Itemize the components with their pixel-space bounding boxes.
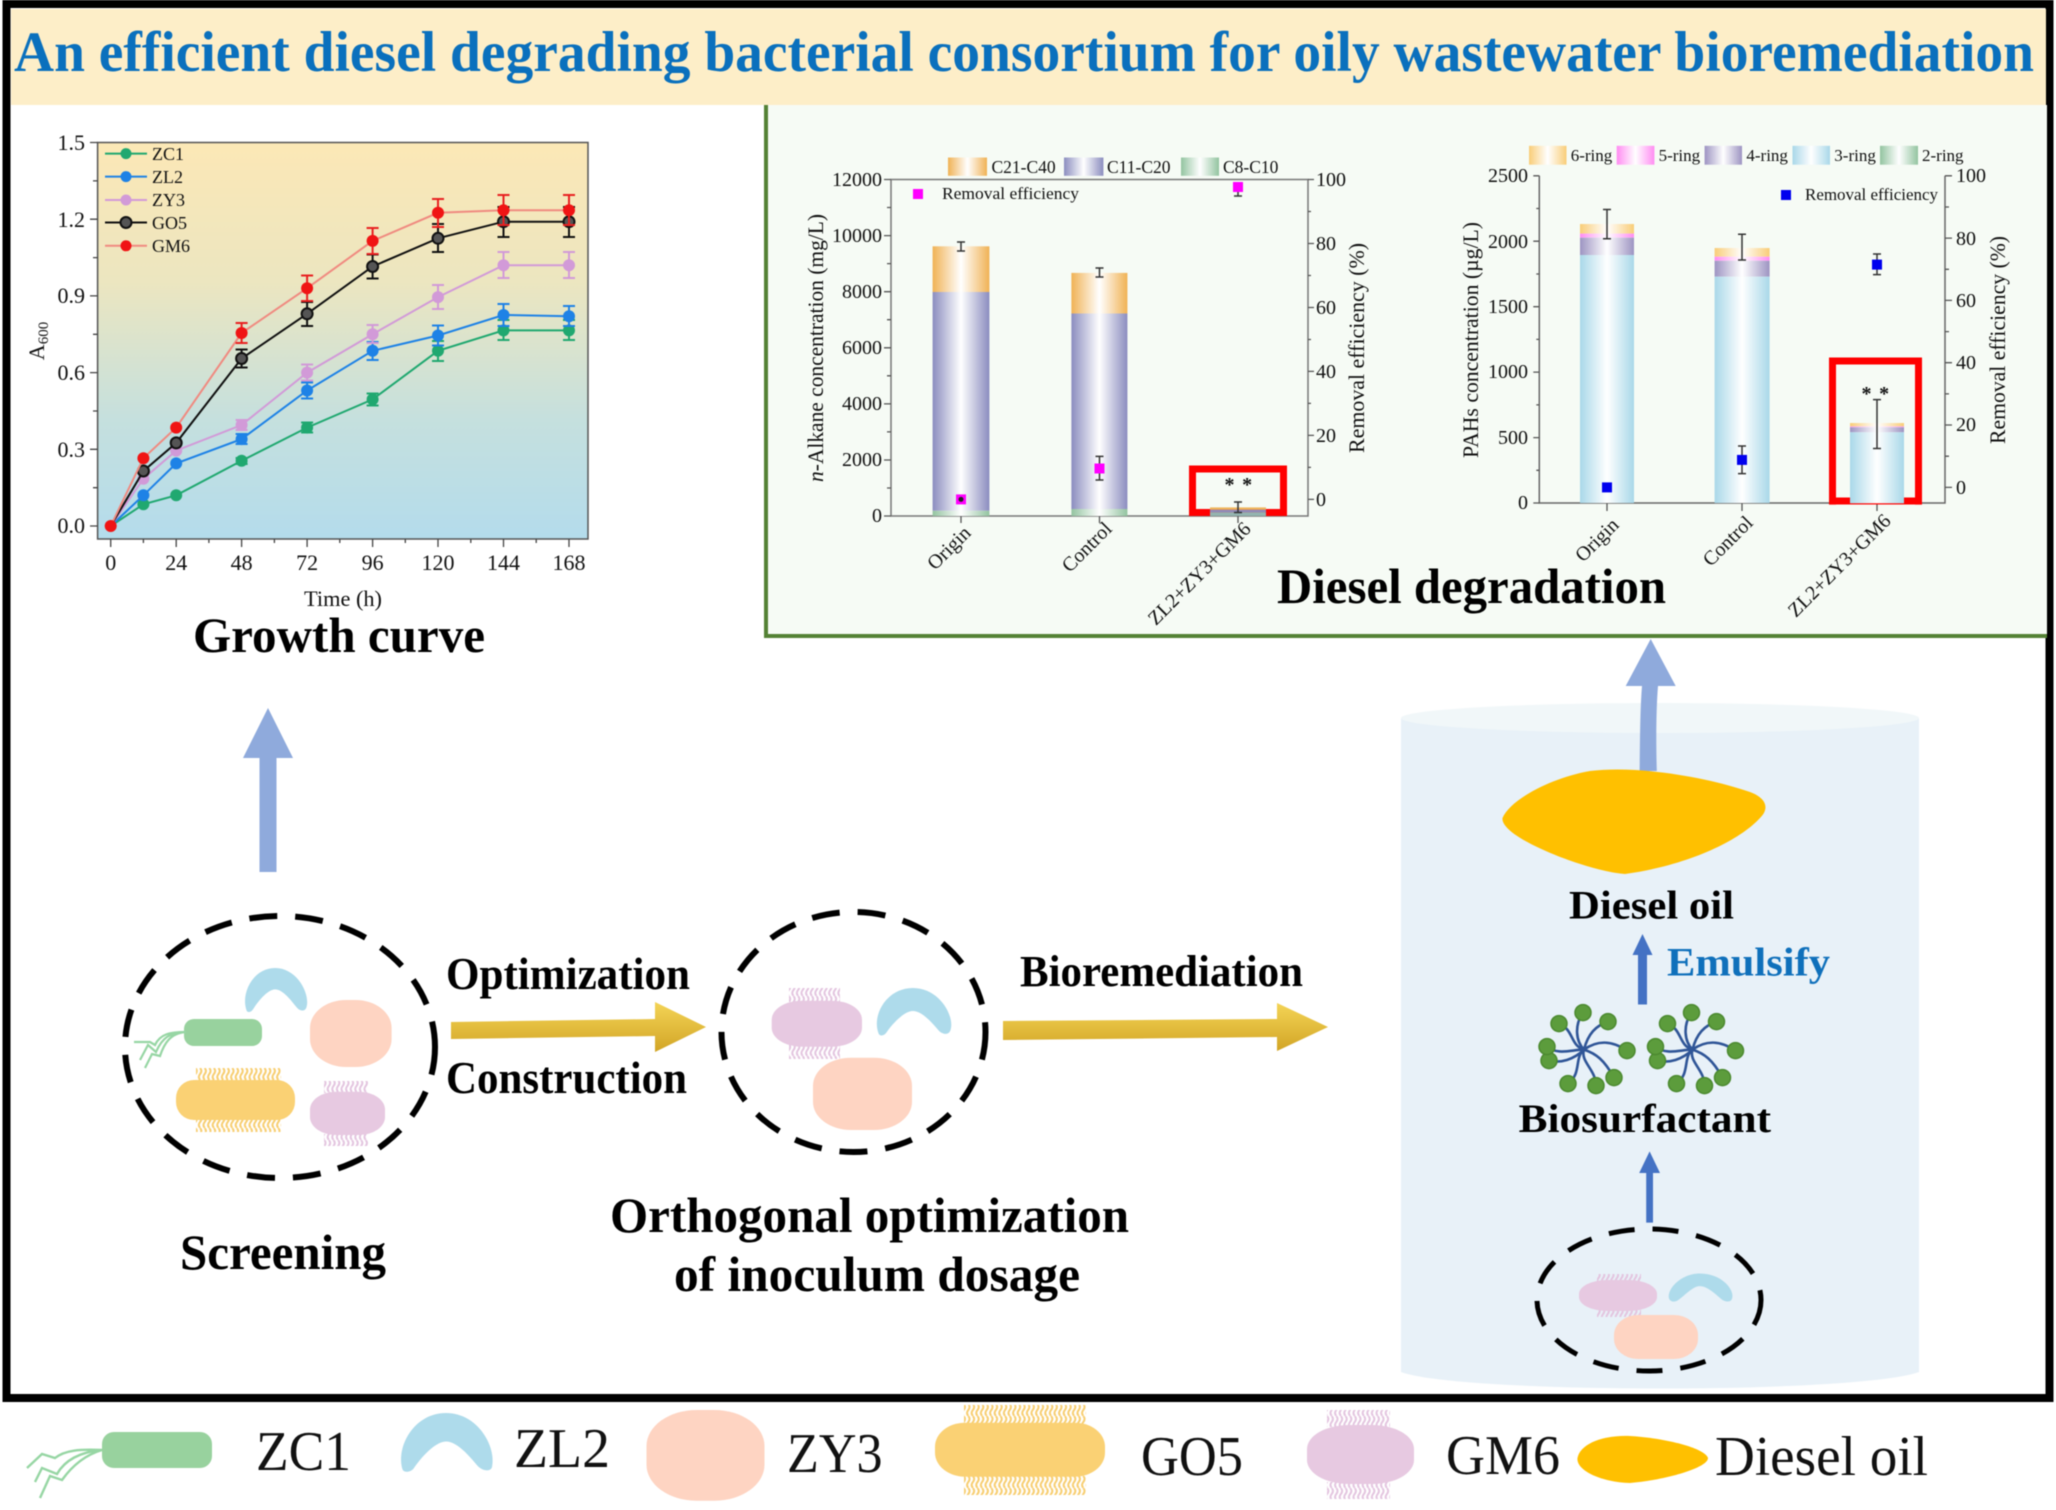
chart: PAHs: 1500: [1488, 296, 1528, 318]
chart: n-alkane: 6000: [842, 337, 882, 359]
chart: PAHs: 0: [1956, 477, 1966, 499]
legend diesel oil: [1577, 1426, 1928, 1488]
legend GO5: [935, 1405, 1243, 1495]
panel: growth curve chart: Time (h): [304, 586, 382, 611]
chart: n-alkane: Removal efficiency (%): [1344, 243, 1369, 453]
chart: n-alkane: 80: [1316, 233, 1336, 255]
legend GM6: [1307, 1410, 1560, 1499]
cell GM6: [772, 988, 862, 1059]
arrow: screening to construction: [451, 1002, 706, 1052]
chart: PAHs: [1458, 146, 2010, 622]
title: An efficient diesel degrading bacterial consortium for oily wastewater bioremediation: [14, 21, 2034, 84]
legend: PAHs: [1529, 146, 1964, 165]
title band: [11, 9, 2046, 105]
panel: growth curve chart: 1.5: [58, 130, 85, 155]
panel: growth curve chart: 48: [231, 550, 253, 575]
cell ZC1: [134, 1019, 262, 1068]
label: diesel oil: Diesel oil: [1569, 883, 1734, 928]
panel: growth curve chart: 144: [487, 550, 520, 575]
chart: n-alkane: 100: [1316, 169, 1346, 191]
chart: PAHs: Control: [1699, 512, 1758, 571]
legend ZC1: ZC1: [256, 1421, 351, 1483]
cell GM6: [310, 1081, 385, 1146]
cell ZL2: [877, 988, 951, 1035]
panel: growth curve chart: 0: [105, 550, 116, 575]
chart: n-alkane: 0: [1316, 489, 1326, 511]
chart: PAHs: 60: [1956, 290, 1976, 312]
label: bioremediation: Bioremediation: [1020, 947, 1303, 996]
cell GO5: [176, 1068, 295, 1132]
biosurfactant micelles: [1539, 1005, 1744, 1094]
panel: diesel degradation: [766, 105, 2047, 636]
series ZY3: [111, 252, 575, 526]
cell ZL2: [245, 968, 307, 1012]
highlight box: [1192, 469, 1284, 516]
chart: PAHs: 80: [1956, 228, 1976, 250]
legend GM6: GM6: [1446, 1425, 1560, 1487]
chart: PAHs: 100: [1956, 165, 1986, 187]
growth chart legend: ZC1: [152, 144, 184, 164]
panel: growth curve chart: 0.0: [58, 513, 85, 538]
series GM6: [105, 195, 575, 532]
cell ZY3: [813, 1058, 912, 1130]
panel: bioreactor cylinder: [1401, 639, 1919, 1388]
label: of inoculum dosage: of inoculum dosage: [674, 1246, 1080, 1302]
legend ZY3: ZY3: [787, 1423, 882, 1485]
legend: alkane: C8-C10: [1223, 157, 1279, 177]
cell cluster: consortium: [1537, 1229, 1761, 1371]
legend: alkane: [948, 157, 1279, 177]
chart: PAHs: 2000: [1488, 231, 1528, 253]
chart: PAHs: 20: [1956, 414, 1976, 436]
panel: growth curve chart: 0.3: [58, 437, 85, 462]
label: optimization: Optimization: [446, 948, 690, 999]
chart: PAHs: 1000: [1488, 361, 1528, 383]
chart: n-alkane: 60: [1316, 297, 1336, 319]
chart: n-alkane: 20: [1316, 425, 1336, 447]
chart: n-alkane: n-Alkane concentration (mg/L): [803, 214, 828, 482]
chart: n-alkane: ZL2+ZY3+GM6: [1144, 518, 1256, 630]
bars: [933, 246, 989, 292]
legend ZC1: [27, 1421, 351, 1498]
chart: PAHs: PAHs concentration (µg/L): [1458, 222, 1483, 458]
panel: growth curve chart: 24: [165, 550, 187, 575]
growth chart legend: GO5: [152, 213, 187, 233]
legend: alkane: C21-C40: [992, 157, 1056, 177]
cell ZY3: [310, 1000, 392, 1067]
cell cluster: orthogonal optimization: [722, 912, 986, 1152]
legend ZY3: [646, 1410, 882, 1501]
chart: n-alkane: * *: [1225, 474, 1253, 496]
arrow: emulsify: [1632, 934, 1652, 1004]
chart: n-alkane: [803, 157, 1369, 630]
chart: n-alkane: 8000: [842, 281, 882, 303]
legend: PAHs: 3-ring: [1834, 146, 1876, 165]
chart: PAHs: 2500: [1488, 165, 1528, 187]
chart: n-alkane: 4000: [842, 393, 882, 415]
series ZC1: [111, 320, 575, 526]
highlight box: [1832, 361, 1918, 505]
panel: growth curve chart: A: [24, 344, 49, 360]
chart: PAHs: Origin: [1571, 514, 1624, 566]
growth chart legend: GM6: [152, 236, 190, 256]
chart: PAHs: 0: [1518, 492, 1528, 514]
panel: growth curve chart: 600: [36, 322, 52, 344]
arrow: to bioreactor: [1003, 1003, 1328, 1051]
legend diesel oil: Diesel oil: [1715, 1426, 1928, 1488]
label: screening: Screening: [180, 1224, 386, 1280]
chart: n-alkane: 0: [872, 505, 882, 527]
legend: PAHs: 4-ring: [1746, 146, 1788, 165]
label: orthogonal optimization: Orthogonal optimization: [610, 1187, 1129, 1243]
growth chart legend: ZY3: [152, 190, 185, 210]
series GO5: [111, 207, 575, 526]
heading: diesel degradation: Diesel degradation: [1277, 558, 1666, 614]
legend: strains: [27, 1405, 1928, 1501]
growth chart legend: ZL2: [152, 167, 183, 187]
chart: PAHs: Removal efficiency (%): [1985, 236, 2010, 444]
label: biosurfactant: Biosurfactant: [1519, 1096, 1772, 1141]
panel: growth curve chart: [24, 130, 588, 611]
chart: n-alkane: Control: [1058, 518, 1117, 577]
chart: PAHs: * *: [1862, 383, 1890, 405]
chart: PAHs: ZL2+ZY3+GM6: [1784, 510, 1896, 622]
chart: n-alkane: 10000: [832, 225, 882, 247]
panel: growth curve chart: 0.6: [58, 360, 85, 385]
legend: PAHs: 6-ring: [1571, 146, 1613, 165]
arrow: screening to growth curve: [243, 708, 293, 872]
legend ZL2: [401, 1413, 610, 1480]
panel: growth curve chart: 72: [296, 550, 318, 575]
heading: growth curve: Growth curve: [193, 607, 485, 663]
panel: growth curve chart: 120: [422, 550, 454, 575]
chart: n-alkane: 12000: [832, 169, 882, 191]
removal efficiency markers: [1096, 182, 1242, 480]
growth chart legend: [105, 144, 190, 256]
cell cluster: screening: [125, 916, 435, 1178]
chart: n-alkane: 2000: [842, 449, 882, 471]
chart: n-alkane: Removal efficiency: [942, 184, 1080, 203]
legend ZL2: ZL2: [514, 1418, 610, 1480]
legend: PAHs: 5-ring: [1659, 146, 1701, 165]
chart: PAHs: 40: [1956, 352, 1976, 374]
legend: alkane: C11-C20: [1107, 157, 1171, 177]
legend GO5: GO5: [1141, 1426, 1243, 1488]
label: emulsify: Emulsify: [1667, 939, 1830, 984]
chart: n-alkane: 40: [1316, 361, 1336, 383]
removal efficiency markers: [1738, 254, 1881, 474]
arrow: to diesel degradation: [1626, 639, 1676, 771]
panel: growth curve chart: 168: [552, 550, 586, 575]
arrow: biosurfactant production: [1639, 1151, 1660, 1223]
panel: growth curve chart: 96: [362, 550, 384, 575]
chart: PAHs: 500: [1498, 427, 1528, 449]
panel: growth curve chart: 1.2: [58, 207, 85, 232]
label: construction: Construction: [446, 1052, 687, 1103]
legend: PAHs: 2-ring: [1922, 146, 1964, 165]
chart: PAHs: Removal efficiency: [1805, 185, 1939, 204]
bars: [1580, 224, 1634, 234]
panel: growth curve chart: 0.9: [58, 283, 85, 308]
chart: n-alkane: Origin: [923, 522, 976, 574]
series ZL2: [111, 304, 575, 526]
diesel oil blob: [1502, 769, 1765, 874]
